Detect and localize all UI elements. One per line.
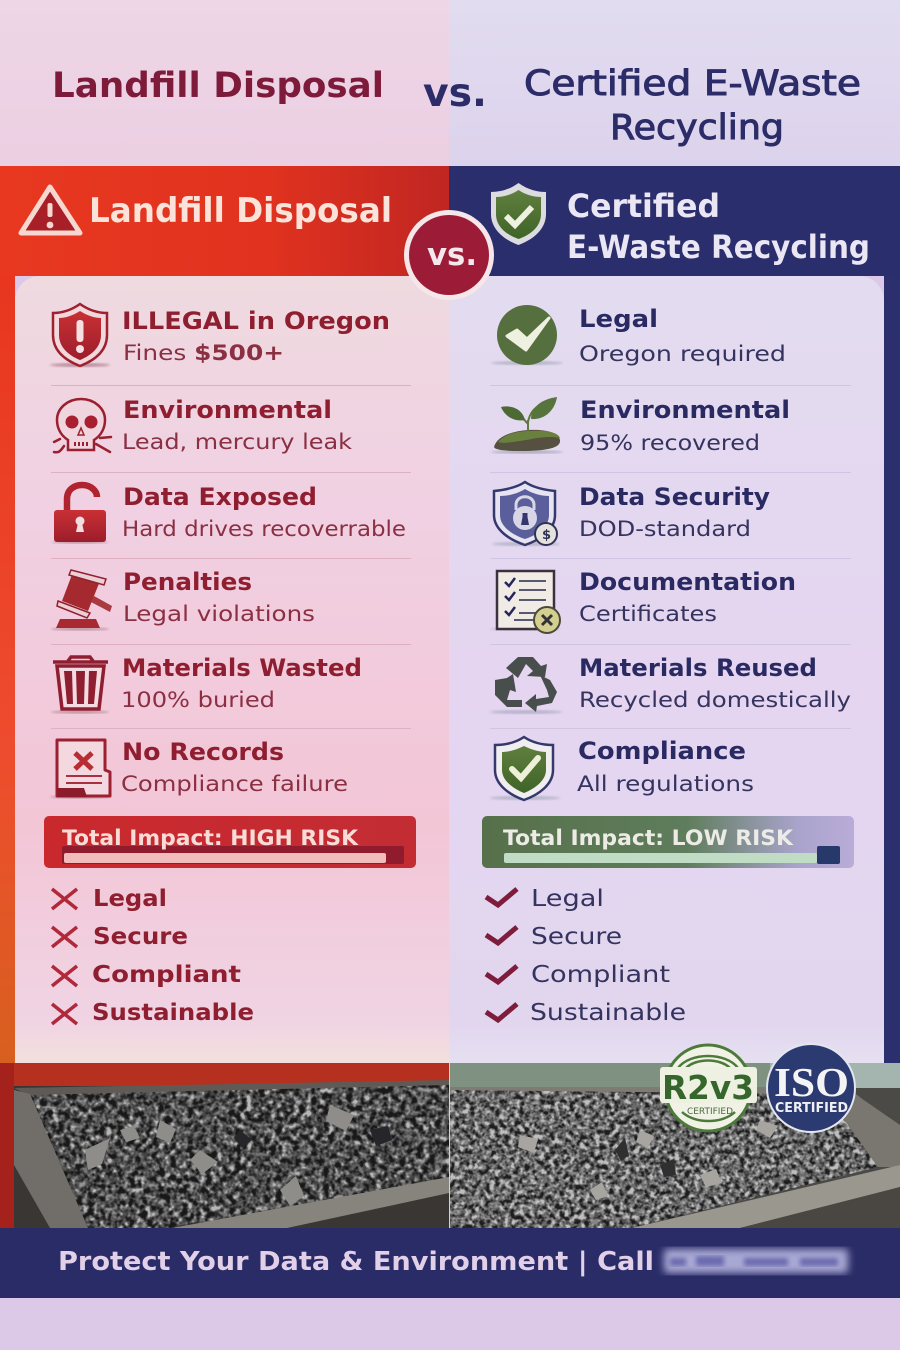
row: legal [491, 305, 786, 367]
row: data security: DOD-standard [579, 517, 751, 542]
row: data security [492, 482, 770, 546]
row: illegal in oregon: ILLEGAL in Oregon [122, 307, 390, 335]
photo: recycling bin of shredded e-waste [450, 1063, 900, 1230]
row: legal: Legal [579, 305, 658, 333]
badge: R2v3 certified: R2v3 [662, 1068, 754, 1107]
row: no records [50, 738, 348, 798]
checklist: landfill fails: Legal [93, 886, 167, 912]
row: documentation [490, 568, 796, 633]
vs badge [404, 210, 494, 300]
row: data exposed: Data Exposed [123, 483, 317, 511]
icon: warning shield [50, 304, 110, 367]
title: Certified E-Waste [524, 64, 861, 104]
row: compliance: All regulations [577, 772, 754, 797]
row: data exposed [52, 483, 406, 544]
icon: lock shield [492, 482, 560, 546]
row: illegal in oregon: Fines $500+ [123, 341, 284, 366]
heading: landfill disposal: Landfill Disposal [89, 191, 392, 231]
icon: compliance shield [490, 737, 560, 800]
checklist: landfill fails: Secure [93, 924, 188, 950]
row: legal: Oregon required [579, 342, 786, 367]
row: compliance [490, 737, 754, 800]
row: materials wasted [51, 654, 362, 714]
panel: recycling background [449, 166, 900, 1063]
checklist: recycling passes [486, 886, 686, 1026]
checklist: recycling passes: Compliant [531, 962, 670, 988]
icon: trash bin [51, 657, 109, 714]
row: materials wasted: 100% buried [121, 688, 275, 713]
row: materials reused: Recycled domestically [579, 688, 851, 713]
checklist: landfill fails [52, 886, 254, 1026]
heading: certified e-waste recycling: Certified [567, 187, 720, 225]
row: materials wasted: Materials Wasted [122, 654, 362, 682]
row: environmental harm: Lead, mercury leak [122, 430, 353, 455]
checklist: landfill fails: Compliant [92, 962, 241, 988]
icon: open padlock [52, 485, 108, 544]
dividers [51, 386, 851, 728]
icon: seedling [491, 397, 563, 454]
checklist: recycling passes: Sustainable [530, 1000, 686, 1026]
icon: green shield [491, 183, 546, 245]
badge: R2v3 certified: CERTIFIED [687, 1107, 733, 1117]
badge: R2v3 certified [660, 1045, 757, 1131]
row: environmental harm: Environmental [123, 396, 332, 424]
redacted phone number [664, 1249, 848, 1273]
badge: ISO certified: CERTIFIED [775, 1101, 848, 1116]
photo: landfill bin of shredded e-waste [0, 1063, 450, 1230]
row: no records: No Records [122, 738, 284, 766]
risk bar: low risk: Total Impact: LOW RISK [503, 826, 794, 850]
title: Landfill Disposal [52, 66, 384, 106]
icon: green check circle [491, 305, 563, 365]
row: data security: Data Security [579, 483, 770, 511]
footer banner: Protect Your Data & Environment | Call [58, 1247, 654, 1277]
checklist: recycling passes: Legal [531, 886, 604, 912]
row: no records: Compliance failure [121, 772, 348, 797]
icon: checklist [490, 571, 560, 633]
row: materials reused: Materials Reused [579, 654, 817, 682]
checklist: landfill fails: Sustainable [92, 1000, 254, 1026]
badge: ISO certified [767, 1044, 855, 1132]
icon: skull [54, 399, 111, 452]
row: environmental benefit: 95% recovered [580, 431, 760, 456]
row: compliance: Compliance [578, 737, 746, 765]
row: penalties: Penalties [123, 568, 252, 596]
icon: document with x [50, 740, 110, 798]
footer banner [0, 1228, 900, 1298]
risk bar: low risk [482, 816, 854, 868]
icon: warning triangle [21, 187, 80, 233]
check marks [486, 889, 517, 1020]
heading: certified e-waste recycling: E-Waste Recycling [567, 228, 870, 266]
title [52, 64, 861, 148]
row: documentation: Certificates [579, 602, 717, 627]
checklist: recycling passes: Secure [531, 924, 622, 950]
row: penalties [51, 568, 315, 630]
row: environmental harm [54, 396, 353, 455]
icon: recycle [490, 657, 562, 714]
badge: ISO certified: ISO [774, 1059, 849, 1105]
icon: gavel [51, 570, 112, 630]
row: environmental benefit [491, 396, 790, 456]
title: Recycling [610, 108, 784, 148]
heading: certified e-waste recycling [567, 187, 870, 266]
vs badge: vs. [427, 237, 477, 273]
row: data exposed: Hard drives recoverrable [122, 517, 406, 542]
row: penalties: Legal violations [123, 602, 315, 627]
row: illegal in oregon [50, 304, 390, 367]
icon: lock shield: $ [542, 528, 551, 543]
row: documentation: Documentation [579, 568, 796, 596]
title: vs. [423, 71, 487, 116]
x marks [52, 889, 77, 1024]
risk bar: high risk [44, 816, 416, 868]
risk bar: high risk: Total Impact: HIGH RISK [62, 826, 359, 850]
row: materials reused [490, 654, 851, 714]
row: environmental benefit: Environmental [580, 396, 790, 424]
panel: landfill background [0, 166, 449, 1063]
